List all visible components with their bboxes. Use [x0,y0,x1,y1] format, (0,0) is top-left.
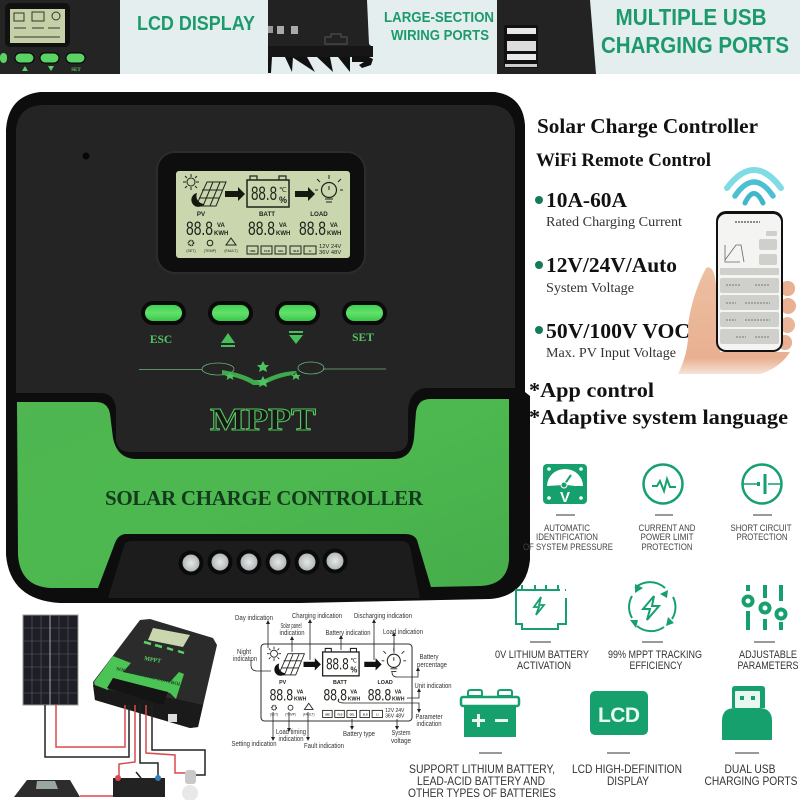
schematic LCD frame: USE [325,714,330,717]
schematic LCD frame: VA [297,690,304,696]
schematic LCD frame: 88.8 [270,685,293,705]
floral ornament [139,361,386,387]
feature: short circuit [730,464,792,543]
schematic LCD frame: KWH [294,697,307,703]
banner text: USB ports [601,4,789,58]
LCD screen: VA [330,223,339,229]
LCD screen: % [279,195,287,205]
banner photo: LCD closeup: SET [71,68,81,73]
spec list: Max. PV Input Voltage [546,346,676,361]
schematic LCD frame: KWH [392,697,405,703]
microphone dot [82,152,90,160]
schematic LCD frame: 88.8 [326,655,349,674]
callout labels: Charging indication [292,613,342,620]
feature: battery support: SUPPORT LITHIUM BATTERY, [409,762,555,776]
icon: LCD badge: LCD [598,704,640,727]
feature: battery support: OTHER TYPES OF BATTERIES [408,786,556,800]
schematic LCD frame: LI [376,714,379,717]
feature: battery support [408,690,556,800]
schematic LCD frame: KWH [348,697,360,703]
feature: current and power limit [638,464,696,553]
callout arrows [251,619,421,741]
wires [45,705,205,796]
icon: wifi signal [727,170,781,203]
schematic LCD frame: BATT [333,680,348,686]
schematic LCD frame: VA [395,690,402,696]
LCD screen: 88.8 [248,219,275,240]
subhead: WiFi: WiFi Remote Control [536,151,711,171]
icon: battery solid [461,690,519,737]
banner text: wiring ports: LARGE-SECTION [384,9,494,26]
LCD screen: 88.8 [251,184,277,205]
LCD screen: KWH [327,231,341,237]
icon: sliders [744,585,786,630]
top banner [0,0,800,74]
headline: product name: Solar Charge Controller [537,114,758,138]
icon: USB plug [722,686,772,740]
LCD screen: LI [309,249,311,253]
terminal screws [180,550,346,574]
control buttons: ESC [150,334,172,346]
callout labels: Setting indication [232,741,277,748]
callout labels: Battery type [343,731,375,738]
callout labels: Unit indication [414,683,452,690]
callout labels [232,613,452,750]
feature: adjustable parameters [738,585,798,672]
spec list: System Voltage [546,281,634,296]
callout labels: Night [237,649,251,656]
MPPT logo: MPPT [210,401,316,437]
LCD screen: (SET) [186,249,196,253]
LCD screen: PV [197,211,206,218]
callout labels: indication [278,736,304,743]
schematic LCD frame: 88.8 [323,685,347,705]
LCD screen: VA [279,223,288,229]
terminal block [108,541,420,598]
bulb [182,770,198,800]
control buttons: SET [352,332,374,344]
schematic LCD frame: % [350,665,357,674]
LCD bezel [157,152,365,273]
LCD screen [176,171,350,258]
feature: battery support: LEAD-ACID BATTERY AND [417,774,545,788]
icon: circuit circle [742,464,782,504]
green panel [17,399,509,588]
schematic LCD frame [261,644,412,721]
banner text: LCD display: LCD DISPLAY [137,13,256,35]
callout labels: Battery indication [326,630,371,637]
LCD screen: SLD [293,249,299,253]
feature: automatic identification [523,464,613,553]
app features: *Adaptive system language [529,405,788,429]
app features: *App control [529,378,654,402]
feature: LCD display: DISPLAY [607,774,649,788]
feature: LCD display [572,691,682,788]
mini controller: SOLAR CHARGE CONTROLLER [116,667,192,691]
icon: voltmeter: V [560,489,570,506]
banner photo: LCD closeup [0,0,120,74]
spec list: 10A-60A [546,188,627,212]
feature: short circuit: PROTECTION [736,532,788,543]
callout labels: Load timing [276,729,306,736]
feature: lithium activation: 0V LITHIUM BATTERY [495,649,590,661]
callout labels: Parameter [416,714,443,721]
schematic LCD frame: (SET) [270,713,278,717]
LCD screen: 36V 48V [319,250,341,256]
banner text: USB ports: MULTIPLE USB [616,4,766,30]
device body [6,92,530,603]
LCD screen: (TEMP) [204,249,216,253]
schematic LCD frame: (FAULT) [303,713,315,717]
schematic LCD frame: 88.8 [368,685,391,705]
wiring diagram [14,615,217,800]
spec list: 50V/100V VOC [546,319,690,343]
callout labels: Fault indication [304,743,344,750]
callout labels: System [392,730,411,737]
feature: lithium activation: ACTIVATION [517,660,571,672]
banner text: wiring ports: WIRING PORTS [391,27,489,44]
LCD screen: KWH [214,231,228,237]
LCD screen: KWH [276,231,290,237]
feature: current and power limit: POWER LIMIT [640,532,694,543]
schematic LCD frame: SLD [363,714,368,717]
feature: MPPT tracking: EFFICIENCY [630,660,683,672]
feature: MPPT tracking: 99% MPPT TRACKING [608,649,702,661]
schematic LCD frame: VA [350,690,357,696]
LCD screen: 12V 24V [319,244,341,250]
app features [529,378,788,429]
callout labels: voltage [391,738,411,745]
LCD screen: (FAULT) [224,249,238,253]
callout labels: indication [233,656,257,663]
callout labels: Load indication [383,629,423,636]
icon: pulse circle [644,464,682,504]
callout labels: indication [280,630,305,637]
feature: MPPT tracking [608,582,702,672]
schematic LCD frame: ℃ [350,658,357,665]
LCD screen: USE [250,249,256,253]
schematic LCD frame: (TEMP) [285,713,296,717]
illustration: hand holding phone [678,211,796,374]
feature: automatic identification: AUTOMATIC [544,523,590,534]
callout labels: Battery [420,654,439,661]
LCD indication diagram [232,613,452,750]
feature: automatic identification: OF SYSTEM PRESSURE [523,542,613,553]
LCD screen: GEL [278,249,284,253]
device faceplate [16,105,515,452]
schematic LCD frame: 36V 48V [385,713,405,719]
LCD screen: 88.8 [299,219,326,240]
feature: lithium activation [495,585,590,672]
feature: dual USB [704,686,798,788]
feature: LCD display: LCD HIGH-DEFINITION [572,762,682,776]
callout labels: indication [416,721,442,728]
feature: dual USB: DUAL USB [724,762,776,776]
control buttons [141,301,387,347]
schematic LCD frame: PV [279,680,287,686]
schematic LCD frame: LOAD [378,680,393,686]
feature: current and power limit: PROTECTION [642,542,693,553]
solar charge controller device [6,92,530,603]
icon: battery outline [516,585,566,629]
spec list: 12V/24V/Auto [546,253,677,277]
callout labels: Day indication [235,615,273,622]
icon: cycle bolt [629,582,675,631]
panel label: SOLAR CHARGE CONTROLLER [105,486,424,510]
feature: automatic identification: IDENTIFICATION [536,532,598,543]
LCD screen: 88.8 [186,219,213,240]
schematic LCD frame: 12V 24V [385,708,405,714]
LCD screen: ℃ [279,187,287,194]
banner text: wiring ports [384,9,494,44]
mini controller: MPPT [144,656,161,665]
mini controller [93,619,217,728]
callout labels: Discharging indication [354,613,412,620]
battery [113,772,165,797]
spec list [535,188,690,361]
spec list: Rated Charging Current [546,215,682,230]
banner photo: USB ports [497,0,596,74]
LCD screen: LOAD [310,211,328,218]
schematic LCD frame: FLD [338,714,343,717]
callout labels: Solar panel [280,623,302,630]
LCD screen: VA [217,223,226,229]
LCD screen: FLD [264,249,270,253]
schematic LCD frame: GEL [350,714,355,717]
banner photo: wiring ports [268,0,373,73]
LCD screen: BATT [259,211,275,218]
feature: current and power limit: CURRENT AND [638,523,696,534]
solar panel [23,615,78,705]
callout labels: percentage [417,662,447,669]
inverter [14,780,80,797]
